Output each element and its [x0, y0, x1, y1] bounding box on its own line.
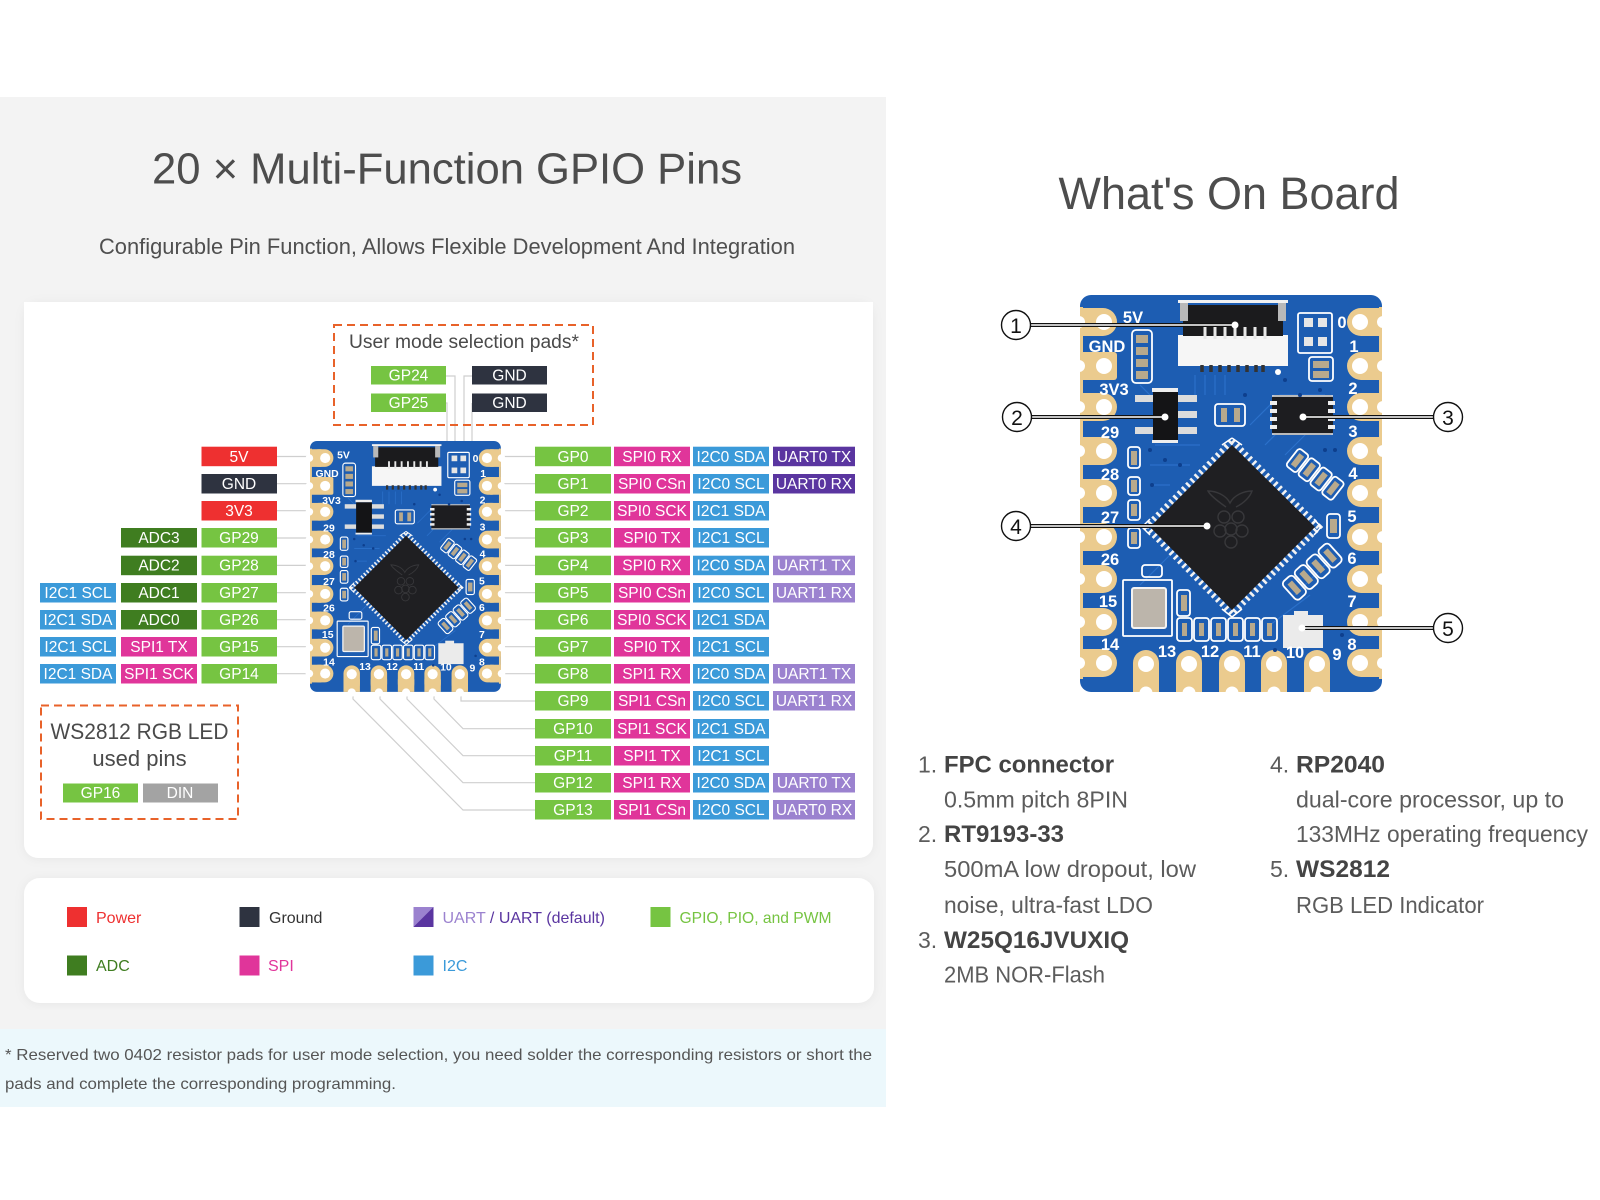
pin: GP29: GP29 [219, 530, 259, 547]
pin: GP6: I2C1 SDA [697, 612, 766, 629]
connector lines [277, 376, 535, 810]
pin: GP26: I2C1 SDA [44, 612, 113, 629]
component list: column 1: RT9193-33 [944, 821, 1064, 848]
panel: pinout card [24, 302, 873, 858]
pin: GP26: ADC0 [138, 612, 180, 629]
pin: GP0: SPI0 RX [622, 449, 682, 466]
pin: GP2: I2C1 SDA [697, 503, 766, 520]
legend: SPI: SPI [268, 958, 294, 975]
pin: GP13: SPI1 CSn [618, 802, 686, 819]
pin: GP2: GP2 [557, 503, 589, 520]
component list: column 2: dual-core processor, up to [1296, 786, 1564, 812]
pin: GP4 [535, 556, 855, 575]
pin: GP7: GP7 [557, 639, 589, 656]
pin: GP4: GP4 [557, 558, 589, 575]
callout box: WS2812 pins: DIN [167, 785, 193, 802]
board photo: large: 26 [1101, 551, 1119, 569]
board photo: small: 5V [337, 451, 350, 462]
board photo: small: 11 [413, 662, 424, 673]
pin: GP14: GP14 [219, 666, 259, 683]
pin: GP9: SPI1 CSn [618, 693, 686, 710]
board photo: small: 3V3 [322, 496, 341, 507]
pin: GP2 [535, 501, 769, 520]
board photo: small: 13 [359, 662, 371, 673]
pin: GP12: I2C0 SDA [697, 775, 766, 792]
component list: column 2: 133MHz operating frequency [1296, 821, 1588, 847]
component list: column 1 [918, 752, 1196, 988]
pin: GP3 [535, 528, 769, 548]
pin: GP13: I2C0 SCL [697, 802, 765, 819]
board photo: small: 26 [323, 604, 335, 615]
board photo: large: 27 [1101, 509, 1119, 527]
board photo: small: 5 [479, 576, 485, 587]
board photo: small: 27 [323, 577, 335, 588]
board photo: small: 4 [480, 549, 486, 560]
callout 5 [1298, 614, 1462, 642]
pin: GP27: I2C1 SCL [44, 585, 112, 602]
pin: GP15: I2C1 SCL [44, 639, 112, 656]
callout box: user mode selection pads: GND [492, 395, 527, 412]
pin: GP9: GP9 [557, 693, 589, 710]
pin: GP7: I2C1 SCL [697, 639, 765, 656]
pin: GP4: SPI0 RX [622, 558, 682, 575]
component list: column 2: WS2812 [1296, 856, 1390, 883]
pin: GP1: UART0 RX [776, 476, 853, 493]
component list: column 1: 500mA low dropout, low [944, 856, 1196, 882]
pin: GP6: GP6 [557, 612, 589, 629]
legend: Power [67, 907, 142, 927]
left pin labels [40, 447, 277, 684]
board photo: small [306, 441, 505, 697]
board photo: small: 3 [480, 523, 486, 534]
callout box: WS2812 pins [41, 706, 238, 819]
pin: GP1: GP1 [557, 476, 589, 493]
legend: I2C: I2C [442, 958, 467, 975]
board photo: small: 12 [386, 662, 398, 673]
board photo: small: 10 [440, 662, 452, 673]
board photo: large: 3 [1348, 423, 1358, 441]
board photo: large: 4 [1348, 465, 1358, 483]
pin: GP3: SPI0 TX [623, 530, 681, 547]
pin: GP8: GP8 [557, 666, 589, 683]
pin: GP12 [535, 773, 855, 792]
pin: GP11 [535, 746, 769, 766]
component list: column 2: 5. [1270, 856, 1289, 882]
pin: GP27: ADC1 [138, 585, 180, 602]
pin: 5V: 5V [230, 449, 249, 466]
pin: GP15: GP15 [219, 639, 259, 656]
board photo: large: 3V3 [1099, 381, 1129, 399]
component list: column 1: 2. [918, 821, 937, 847]
component list: column 1: 1. [918, 752, 937, 778]
pin: GP0: I2C0 SDA [697, 449, 766, 466]
main heading: 20 × Multi-Function GPIO Pins [152, 144, 742, 194]
board photo: small: 1 [480, 469, 486, 480]
pin: GP10: GP10 [553, 721, 593, 738]
board photo: large: 1 [1349, 338, 1359, 356]
callout 3 [1300, 402, 1462, 432]
component list: column 1: 3. [918, 927, 937, 953]
board photo: large: 5 [1347, 508, 1357, 526]
pin: GP8: I2C0 SDA [697, 666, 766, 683]
board photo: large: 2 [1348, 380, 1358, 398]
pin: GP27: GP27 [219, 585, 259, 602]
component list: column 2: RGB LED Indicator [1296, 892, 1484, 918]
callout box: user mode selection pads: GP24 [389, 368, 429, 384]
pin: GP5: GP5 [557, 585, 589, 602]
component list: column 1: W25Q16JVUXIQ [944, 927, 1129, 954]
board photo: small: 2 [480, 496, 486, 507]
pin: GP7: SPI0 TX [623, 639, 681, 656]
pin: GP10 [535, 719, 769, 738]
pin: GP8 [535, 664, 855, 684]
board photo: large: 28 [1101, 466, 1119, 484]
pin: GP10: SPI1 SCK [617, 721, 688, 738]
pin: GP13 [535, 800, 855, 820]
pin: 3V3 [202, 501, 277, 520]
board photo: large: 7 [1347, 593, 1357, 611]
board photo: small: GND [316, 469, 339, 480]
panel: legend [24, 878, 874, 1003]
pin: GP13: UART0 RX [776, 802, 853, 819]
legend: Power: Power [96, 910, 142, 927]
component list: column 1: noise, ultra-fast LDO [944, 892, 1153, 918]
pin: GP6 [535, 610, 769, 630]
pin: GND: GND [222, 476, 256, 493]
pin: 3V3: 3V3 [225, 503, 253, 520]
pin: GP8: UART1 TX [777, 666, 852, 683]
board photo: large [1073, 295, 1389, 700]
pin: GP12: SPI1 RX [622, 775, 682, 792]
legend: ADC: ADC [96, 958, 130, 975]
board photo: large: 15 [1099, 593, 1117, 611]
callout 1 [1002, 310, 1238, 340]
board photo: small: 14 [323, 657, 335, 668]
board photo: large: 8 [1347, 636, 1357, 654]
legend: UART: UART / UART (default) [442, 910, 605, 927]
callout 1: 1 [1010, 315, 1022, 338]
legend: SPI [240, 956, 294, 976]
callout box: WS2812 pins: WS2812 RGB LED [50, 719, 228, 744]
pin: GP9 [535, 691, 855, 710]
component list: column 2 [1270, 752, 1588, 918]
callout box: user mode selection pads: User mode selection pads* [349, 332, 580, 353]
pin: GP3: I2C1 SCL [697, 530, 765, 547]
board photo: small: 28 [323, 550, 335, 561]
pin: GP7 [535, 637, 769, 656]
pin: GP6: SPI0 SCK [617, 612, 688, 629]
pin: GP15: SPI1 TX [130, 639, 188, 656]
board photo: large: 6 [1347, 550, 1357, 568]
board photo: small: 6 [479, 603, 485, 614]
left panel background [0, 97, 886, 1030]
legend: ADC [67, 956, 130, 976]
pin: GP14 [40, 664, 277, 684]
board photo: large: 11 [1243, 643, 1261, 661]
pin: GP11: GP11 [554, 748, 592, 765]
pin: GP10: I2C1 SDA [697, 721, 766, 738]
board photo: small: 15 [322, 630, 334, 641]
board photo: large: 10 [1286, 644, 1304, 662]
board photo: large: GND [1089, 338, 1125, 356]
pin: GP27 [40, 583, 277, 602]
board photo: small: 7 [479, 630, 485, 641]
pin: GP5: I2C0 SCL [697, 585, 765, 602]
board photo: small: 8 [479, 657, 485, 668]
board photo: large: 0 [1337, 314, 1347, 332]
subheading: Configurable Pin Function, Allows Flexible Development And Integration [99, 234, 795, 259]
callout 3: 3 [1442, 407, 1454, 430]
board photo: large: 29 [1101, 424, 1119, 442]
pin: GP4: I2C0 SDA [697, 558, 766, 575]
pin: GP11: SPI1 TX [623, 748, 681, 765]
board photo: small: 9 [470, 664, 476, 675]
pin: GP0: UART0 TX [777, 449, 852, 466]
pin: GP29 [121, 528, 277, 548]
pin: GP2: SPI0 SCK [617, 503, 688, 520]
board photo: small: 0 [473, 454, 479, 465]
legend: GPIO: GPIO, PIO, and PWM [680, 910, 832, 927]
right pin labels [535, 447, 855, 820]
heading: What's On Board: What's On Board [1058, 168, 1400, 219]
pin: GP26 [40, 610, 277, 630]
board photo: large: 9 [1332, 646, 1342, 664]
component list: column 2: RP2040 [1296, 752, 1385, 778]
callout 4 [1002, 512, 1210, 540]
pin: GP29: ADC3 [138, 530, 180, 547]
panel: footnote: pads and complete the corresponding programming. [5, 1076, 396, 1093]
board photo: large: 14 [1101, 636, 1120, 654]
callout box: WS2812 pins: used pins [92, 746, 187, 771]
pin: GP12: GP12 [553, 775, 593, 792]
pin: GP5 [535, 583, 855, 602]
pin: GP11: I2C1 SCL [697, 748, 765, 765]
pin: GP9: I2C0 SCL [697, 693, 765, 710]
pin: 5V [202, 447, 277, 466]
legend: Ground: Ground [269, 910, 322, 927]
board photo: large: 13 [1158, 643, 1176, 661]
legend: I2C [414, 956, 467, 976]
callout 5: 5 [1442, 618, 1454, 641]
pin: GP5: UART1 RX [776, 585, 853, 602]
callout 2 [1002, 402, 1168, 432]
callout 2: 2 [1011, 407, 1023, 430]
board photo: large: 12 [1201, 643, 1219, 661]
board photo: small: 29 [323, 523, 335, 534]
component list: column 1: FPC connector [944, 752, 1114, 778]
pin: GP8: SPI1 RX [622, 666, 682, 683]
pin: GP26: GP26 [219, 612, 259, 629]
pin: GP5: SPI0 CSn [618, 585, 686, 602]
pin: GP9: UART1 RX [776, 693, 853, 710]
pin: GP1 [535, 474, 855, 494]
pin: GP14: SPI1 SCK [124, 666, 195, 683]
pin: GP0 [535, 447, 855, 466]
pin: GP12: UART0 TX [777, 775, 852, 792]
component list: column 2: 4. [1270, 752, 1289, 778]
callout box: user mode selection pads: GND [492, 368, 527, 384]
pin: GP15 [40, 637, 277, 656]
callout 4: 4 [1010, 516, 1022, 539]
pin: GP0: GP0 [557, 449, 589, 466]
pin: GP28: GP28 [219, 558, 259, 575]
component list: column 1: 0.5mm pitch 8PIN [944, 786, 1128, 812]
board photo: large: 5V [1123, 309, 1143, 327]
pin: GP1: SPI0 CSn [618, 476, 686, 493]
pin: GP3: GP3 [557, 530, 589, 547]
pin: GP28: ADC2 [138, 558, 180, 575]
pin: GP1: I2C0 SCL [697, 476, 765, 493]
panel: footnote [0, 1029, 886, 1107]
pin: GND [202, 474, 277, 494]
legend: Ground [240, 907, 322, 927]
callout box: user mode selection pads: GP25 [389, 395, 428, 412]
panel: footnote: * Reserved two 0402 resistor pads for user mode selection, you need solder the corresponding resistors or short the [5, 1047, 872, 1064]
pin: GP13: GP13 [553, 802, 593, 819]
callout box: WS2812 pins: GP16 [81, 785, 120, 802]
pin: GP14: I2C1 SDA [44, 666, 113, 683]
pin: GP28 [121, 556, 277, 575]
callout box: user mode selection pads [334, 325, 593, 425]
component list: column 1: 2MB NOR-Flash [944, 962, 1105, 988]
pin: GP4: UART1 TX [777, 558, 852, 575]
